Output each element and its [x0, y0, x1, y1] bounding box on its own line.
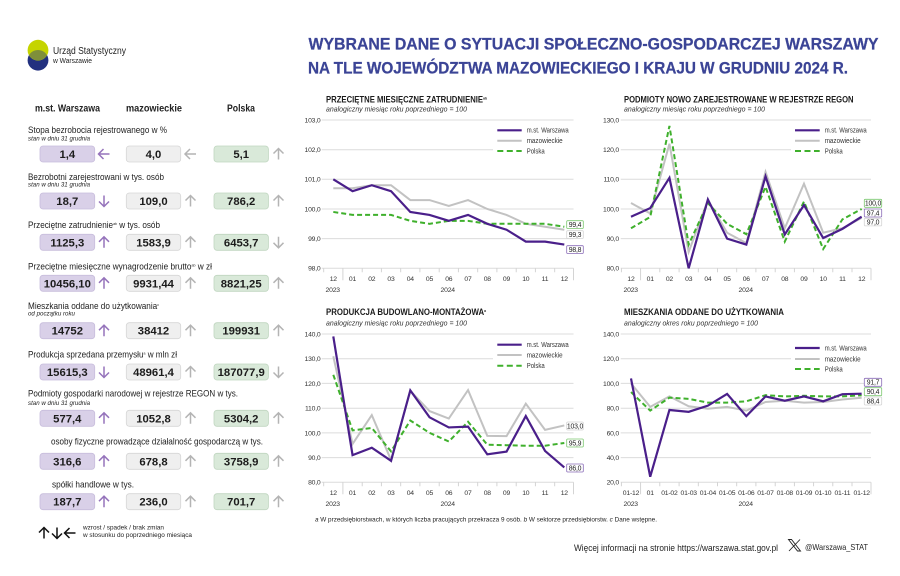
axes and grid: 01-02 — [661, 490, 678, 497]
row: mieszkania oddane: c — [157, 302, 159, 307]
row: osoby fizyczne: osoby fizyczne prowadzące działalność gospodarczą w tys. — [51, 436, 263, 446]
end value labels: 99,4 — [569, 222, 582, 229]
axes and grid: 01-06 — [738, 490, 755, 497]
axes and grid: 11 — [542, 276, 549, 283]
logo: Urząd Statystyczny w Warszawie — [28, 40, 126, 71]
row: produkcja sprzedana przemysłu: a — [143, 350, 146, 355]
end value labels: 99,3 — [569, 232, 582, 239]
axes and grid: 2023 — [624, 501, 638, 508]
row: bezrobotni zarejestrowani: stan w dniu 31 grudnia — [28, 183, 91, 189]
axes and grid: 110,0 — [305, 406, 321, 413]
end value labels — [864, 199, 882, 227]
axes and grid: 2024 — [441, 287, 455, 294]
axes and grid: 07 — [464, 276, 472, 283]
row: mieszkania oddane: 14752 — [52, 326, 83, 338]
column headers — [35, 104, 255, 114]
panel: chart przeciętne zatrudnienie — [304, 95, 583, 294]
axes and grid: 100,0 — [304, 430, 321, 437]
data lines — [631, 126, 862, 268]
data lines — [631, 378, 862, 477]
end value labels: 100,0 — [865, 201, 881, 208]
axes and grid: 20,0 — [607, 480, 619, 487]
axes and grid: 03 — [387, 490, 395, 497]
axes and grid: 12 — [330, 490, 337, 497]
icon: X logo — [788, 540, 800, 551]
legend: m.st. Warszawa — [527, 128, 569, 135]
end value labels — [567, 422, 583, 472]
column headers: Polska — [227, 104, 255, 114]
axes and grid: 01-04 — [700, 490, 717, 497]
axes and grid: 2023 — [624, 287, 638, 294]
row: wynagrodzenie brutto: 10456,10 — [44, 278, 91, 290]
row: produkcja sprzedana przemysłu: 187077,9 — [218, 367, 265, 379]
axes and grid: 80,0 — [308, 480, 321, 487]
row: spółki handlowe: 236,0 — [139, 497, 168, 509]
row: produkcja sprzedana przemysłu: Produkcja sprzedana przemysłu — [28, 349, 159, 359]
axes and grid: 04 — [407, 490, 414, 497]
row: spółki handlowe — [40, 479, 284, 510]
end value labels: 86,0 — [569, 465, 582, 472]
row: przeciętne zatrudnienie: w tys. osób — [117, 220, 160, 230]
axes and grid: 40,0 — [607, 455, 619, 462]
chart title: PRZECIĘTNE MIESIĘCZNE ZATRUDNIENIE — [326, 95, 513, 105]
axes and grid: 10 — [522, 276, 530, 283]
row: produkcja sprzedana przemysłu — [28, 349, 284, 380]
row: stopa bezrobocia: 5,1 — [233, 149, 249, 161]
axes and grid: 120,0 — [603, 147, 619, 154]
row: mieszkania oddane: 199931 — [222, 326, 260, 338]
legend: m.st. Warszawa — [825, 345, 867, 352]
axes and grid: 110,0 — [603, 177, 619, 184]
axes and grid: 05 — [724, 276, 731, 283]
row: wynagrodzenie brutto: 9931,44 — [133, 278, 175, 290]
end value labels: 91,7 — [867, 380, 880, 387]
axes and grid — [603, 117, 871, 294]
axes and grid: 2024 — [441, 501, 455, 508]
axes and grid: 01-07 — [757, 490, 774, 497]
end value labels: 98,8 — [569, 247, 582, 254]
axes and grid: 11 — [839, 276, 846, 283]
axes and grid: 140,0 — [304, 331, 321, 338]
row: podmioty gospodarki narodowej: 577,4 — [53, 413, 82, 425]
end value labels: 90,4 — [867, 389, 880, 396]
axes and grid: 04 — [704, 276, 712, 283]
chart title: MIESZKANIA ODDANE DO UŻYTKOWANIA — [624, 307, 784, 317]
row: podmioty gospodarki narodowej — [28, 389, 284, 426]
axes and grid: 120,0 — [603, 356, 619, 363]
axes and grid: 130,0 — [603, 117, 619, 124]
panel: chart mieszkania oddane do użytkowania — [603, 307, 882, 508]
column headers: mazowieckie — [126, 104, 182, 114]
axes and grid: 01-12 — [854, 490, 870, 497]
axes and grid: 102,0 — [304, 147, 321, 154]
row: mieszkania oddane: 38412 — [138, 326, 169, 338]
axes and grid: 100,0 — [603, 381, 619, 388]
row: podmioty gospodarki narodowej: Podmioty gospodarki narodowej w rejestrze REGON w tys. — [28, 389, 238, 399]
axes and grid: 90,0 — [607, 236, 619, 243]
axes and grid: 06 — [445, 276, 453, 283]
axes and grid: 101,0 — [304, 177, 321, 184]
footnotes: a W przedsiębiorstwach, w których liczba pracujących przekracza 9 osób. b W sektorze przedsiębiorstw. c Dane wstępne. — [315, 517, 657, 524]
axes and grid: 02 — [666, 276, 673, 283]
row: produkcja sprzedana przemysłu: 48961,4 — [133, 367, 175, 379]
axes and grid: 12 — [858, 276, 866, 283]
panel: indicators table — [28, 104, 284, 539]
row: wynagrodzenie brutto — [28, 261, 284, 291]
axes and grid: 12 — [627, 276, 635, 283]
row: podmioty gospodarki narodowej: 5304,2 — [224, 413, 258, 425]
axes and grid: 11 — [542, 490, 549, 497]
row: spółki handlowe: spółki handlowe w tys. — [52, 479, 134, 489]
axes and grid: 2024 — [739, 501, 753, 508]
axes and grid: 10 — [820, 276, 827, 283]
axes and grid: 2024 — [739, 287, 753, 294]
title: NA TLE WOJEWÓDZTWA MAZOWIECKIEGO I KRAJU W GRUDNIU 2024 R. — [308, 59, 848, 78]
row: mieszkania oddane: od początku roku — [28, 312, 76, 318]
title — [308, 35, 879, 78]
axes and grid: 01 — [647, 276, 654, 283]
axes and grid: 80,0 — [607, 266, 619, 273]
axes and grid: 09 — [503, 490, 510, 497]
row: produkcja sprzedana przemysłu: 15615,3 — [47, 367, 88, 379]
row: bezrobotni zarejestrowani: 786,2 — [227, 196, 255, 208]
end value labels — [864, 378, 882, 405]
footer link text: Więcej informacji na stronie https://warszawa.stat.gov.pl — [574, 543, 778, 554]
axes and grid: 03 — [387, 276, 395, 283]
chart title: PODMIOTY NOWO ZAREJESTROWANE W REJESTRZE REGON — [624, 95, 854, 105]
end value labels: 95,9 — [569, 440, 582, 447]
axes and grid: 09 — [503, 276, 510, 283]
axes and grid: 103,0 — [304, 117, 321, 124]
legend: Polska — [527, 363, 545, 370]
axes and grid: 01-12 — [623, 490, 640, 497]
axes and grid: 99,0 — [308, 236, 321, 243]
end value labels: 88,4 — [867, 398, 880, 405]
axes and grid: 100,0 — [304, 206, 321, 213]
legend — [791, 340, 872, 376]
row: przeciętne zatrudnienie — [28, 220, 284, 250]
chart title: ab — [483, 96, 487, 101]
row: osoby fizyczne: 3758,9 — [224, 456, 258, 468]
chart title: analogiczny miesiąc roku poprzedniego = 100 — [326, 319, 468, 328]
panel: chart podmioty nowo zarejestrowane — [603, 95, 882, 294]
row: przeciętne zatrudnienie: 6453,7 — [224, 237, 258, 249]
chart title — [624, 95, 854, 114]
logo: Urząd Statystyczny w Warszawie: Urząd Statystyczny — [53, 46, 126, 57]
row: przeciętne zatrudnienie: 1125,3 — [50, 237, 84, 249]
axes and grid: 130,0 — [304, 356, 321, 363]
row: podmioty gospodarki narodowej: 1052,8 — [136, 413, 171, 425]
axes and grid: 60,0 — [607, 430, 619, 437]
axes and grid: 2023 — [326, 287, 340, 294]
axes and grid: 01-08 — [777, 490, 793, 497]
legend — [493, 123, 574, 159]
axes and grid: 01 — [349, 276, 356, 283]
logo: Urząd Statystyczny w Warszawie: w Warszawie — [52, 58, 92, 65]
legend: Polska — [825, 148, 843, 155]
axes and grid: 02 — [368, 490, 376, 497]
axes and grid: 12 — [330, 276, 337, 283]
end value labels: 97,0 — [867, 220, 880, 227]
column headers: m.st. Warszawa — [35, 104, 100, 114]
arrow legend: wzrost / spadek / brak zmian — [82, 524, 164, 531]
legend: Polska — [825, 366, 843, 373]
legend — [493, 337, 574, 373]
row: mieszkania oddane — [28, 301, 284, 339]
axes and grid: 08 — [484, 490, 491, 497]
chart title: analogiczny okres roku poprzedniego = 100 — [624, 319, 759, 328]
axes and grid: 98,0 — [308, 266, 321, 273]
axes and grid: 100,0 — [603, 206, 619, 213]
row: osoby fizyczne — [40, 436, 284, 469]
row: stopa bezrobocia: 1,4 — [59, 149, 76, 161]
data lines — [333, 179, 564, 245]
row: stopa bezrobocia: stan w dniu 31 grudnia — [28, 137, 91, 143]
axes and grid: 140,0 — [603, 331, 619, 338]
axes and grid: 09 — [800, 276, 808, 283]
row: przeciętne zatrudnienie: 1583,9 — [136, 237, 171, 249]
chart title — [326, 307, 487, 328]
row: bezrobotni zarejestrowani: 109,0 — [139, 196, 168, 208]
row: podmioty gospodarki narodowej: stan w dniu 31 grudnia — [28, 401, 91, 407]
chart title: a — [484, 308, 487, 313]
axes and grid: 08 — [484, 276, 491, 283]
chart title: analogiczny miesiąc roku poprzedniego = 100 — [326, 105, 468, 114]
legend: mazowieckie — [825, 356, 861, 363]
legend: mazowieckie — [527, 352, 563, 359]
row: spółki handlowe: 701,7 — [227, 497, 255, 509]
axes and grid: 10 — [522, 490, 530, 497]
legend: Polska — [527, 148, 545, 155]
data lines — [333, 336, 564, 467]
axes and grid: 12 — [561, 490, 568, 497]
row: wynagrodzenie brutto: 8821,25 — [221, 278, 262, 290]
row: bezrobotni zarejestrowani — [28, 172, 284, 209]
axes and grid: 03 — [685, 276, 693, 283]
row: wynagrodzenie brutto: Przeciętne miesięczne wynagrodzenie brutto — [28, 261, 210, 271]
axes and grid: 80,0 — [607, 406, 619, 413]
end value labels — [567, 221, 583, 254]
axes and grid — [304, 331, 574, 508]
row: osoby fizyczne: 316,6 — [53, 456, 81, 468]
legend: mazowieckie — [825, 138, 861, 145]
chart title — [624, 307, 784, 328]
row: wynagrodzenie brutto: w zł — [196, 261, 212, 271]
axes and grid: 2023 — [326, 501, 340, 508]
legend: mazowieckie — [527, 138, 563, 145]
legend — [791, 123, 872, 159]
axes and grid: 01 — [647, 490, 654, 497]
row: spółki handlowe: 187,7 — [53, 497, 81, 509]
chart title — [326, 95, 487, 114]
legend: m.st. Warszawa — [825, 128, 867, 135]
row: mieszkania oddane: Mieszkania oddane do użytkowania — [28, 301, 173, 311]
row: stopa bezrobocia — [28, 125, 284, 162]
axes and grid — [603, 331, 871, 508]
row: przeciętne zatrudnienie: Przeciętne zatrudnienie — [28, 220, 124, 230]
row: bezrobotni zarejestrowani: Bezrobotni zarejestrowani w tys. osób — [28, 172, 164, 182]
row: stopa bezrobocia: 4,0 — [146, 149, 161, 161]
axes and grid: 05 — [426, 276, 433, 283]
legend: m.st. Warszawa — [527, 342, 569, 349]
end value labels: 103,0 — [567, 423, 583, 430]
end value labels: 97,4 — [867, 210, 880, 217]
arrow legend — [39, 524, 192, 539]
axes and grid: 01-09 — [796, 490, 813, 497]
axes and grid: 07 — [464, 490, 472, 497]
axes and grid: 12 — [561, 276, 568, 283]
row: bezrobotni zarejestrowani: 18,7 — [56, 196, 78, 208]
panel: chart produkcja budowlano-montażowa — [304, 307, 583, 508]
axes and grid: 01-03 — [681, 490, 697, 497]
axes and grid: 01-11 — [834, 490, 851, 497]
arrow legend: w stosunku do poprzedniego miesiąca — [82, 532, 192, 539]
axes and grid: 01-05 — [719, 490, 736, 497]
axes and grid: 90,0 — [308, 455, 321, 462]
axes and grid: 02 — [368, 276, 376, 283]
axes and grid: 01 — [349, 490, 356, 497]
axes and grid: 07 — [762, 276, 769, 283]
row: osoby fizyczne: 678,8 — [139, 456, 168, 468]
chart title: analogiczny miesiąc roku poprzedniego = 100 — [624, 105, 766, 114]
footer handle: @Warszawa_STAT — [805, 542, 868, 552]
axes and grid: 05 — [426, 490, 433, 497]
axes and grid: 06 — [445, 490, 453, 497]
axes and grid: 120,0 — [304, 381, 321, 388]
chart title: PRODUKCJA BUDOWLANO-MONTAŻOWA — [326, 307, 512, 317]
row: stopa bezrobocia: Stopa bezrobocia rejestrowanego w % — [28, 125, 167, 135]
row: przeciętne zatrudnienie: ab — [113, 221, 118, 226]
row: wynagrodzenie brutto: ab — [192, 262, 196, 267]
axes and grid — [304, 117, 574, 294]
axes and grid: 06 — [743, 276, 750, 283]
axes and grid: 01-10 — [815, 490, 832, 497]
row: produkcja sprzedana przemysłu: w mln zł — [145, 349, 177, 359]
axes and grid: 04 — [407, 276, 414, 283]
axes and grid: 08 — [781, 276, 789, 283]
